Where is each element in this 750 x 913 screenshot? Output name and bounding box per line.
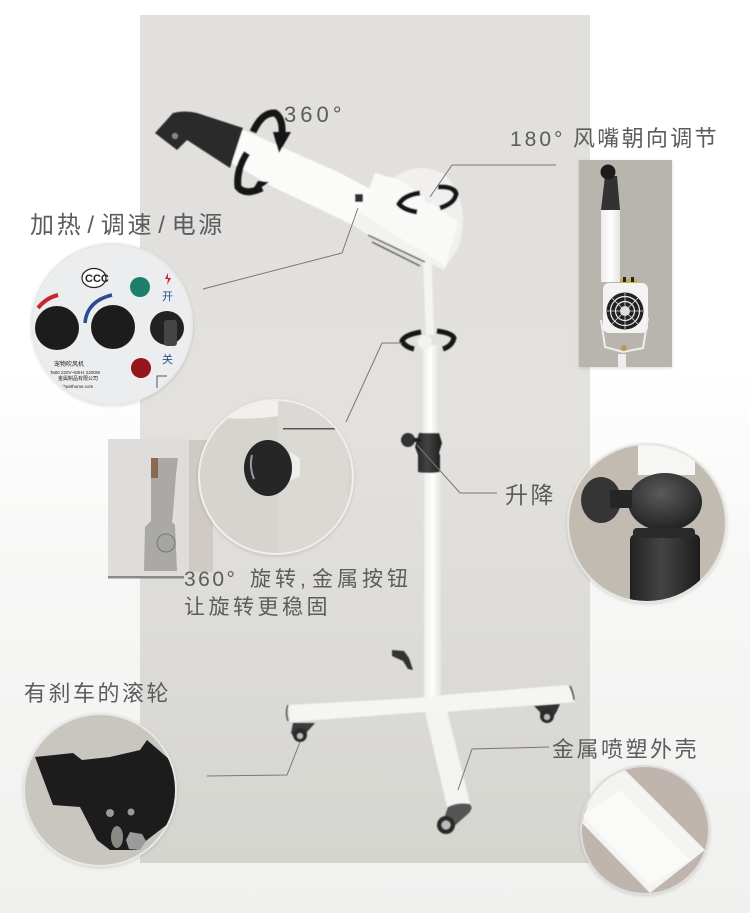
panel: knob circle: [197, 399, 355, 557]
leader lines: [203, 165, 556, 790]
panel: control panel circle: 关: [162, 352, 173, 366]
indicator red: [131, 358, 151, 378]
text block: rotation button: 360°: [184, 568, 237, 591]
casters: [291, 650, 560, 834]
stand pole: [421, 210, 441, 705]
panel: control panel circle: [30, 240, 200, 410]
icon: rotation arrows 360: [238, 113, 291, 196]
heading: lift: 升降: [505, 482, 556, 508]
text block: rotation button: 旋转,: [250, 568, 310, 591]
heading: metal shell: 金属喷塑外壳: [552, 737, 699, 762]
text block: rotation button: 金属按钮: [312, 568, 412, 591]
icon: rotation arrows pole: [402, 331, 454, 349]
heading: 180 degree nozzle adjust: 风嘴朝向调节: [573, 126, 719, 151]
text block: rotation button: 让旋转更稳固: [184, 596, 331, 619]
panel: brake caster circle: [22, 713, 178, 869]
heading: 180 degree nozzle adjust: [510, 126, 719, 151]
panel: lift collar circle: [566, 443, 728, 605]
photo: side bracket: [108, 439, 213, 578]
icon: CCC mark: [82, 268, 109, 288]
panel: control panel circle: .zbpethome.com: [60, 384, 94, 389]
heading: 360 degree: 360°: [284, 102, 346, 127]
dryer head: [155, 112, 463, 270]
panel: control panel circle: 宠物吹风机: [54, 360, 84, 368]
panel: control panel circle: 开: [162, 291, 173, 303]
heading: heat speed power: 加热/调速/电源: [30, 212, 225, 239]
panel: product backdrop: [140, 15, 590, 863]
product: dryer stand: [155, 112, 575, 834]
height adjustment collar: [401, 433, 442, 473]
control knob on arm: [355, 194, 363, 202]
indicator green: [130, 277, 150, 297]
text block: rotation button: [184, 568, 412, 619]
panel: nozzle view photo: [579, 160, 672, 367]
panel: coated shell circle: [579, 765, 711, 897]
icon: CCC mark: CCC: [85, 273, 109, 285]
icon: rotation arrows 180: [399, 187, 456, 212]
heading: caster with brake: 有刹车的滚轮: [24, 681, 171, 706]
panel: control panel circle: Ta00 220V~50Hz 2200W: [50, 370, 101, 375]
panel: control panel circle: 金属制品有限公司: [58, 375, 98, 382]
heading: 180 degree nozzle adjust: 180°: [510, 128, 565, 151]
icon: fan grille: [606, 292, 644, 330]
base legs: [286, 685, 575, 807]
